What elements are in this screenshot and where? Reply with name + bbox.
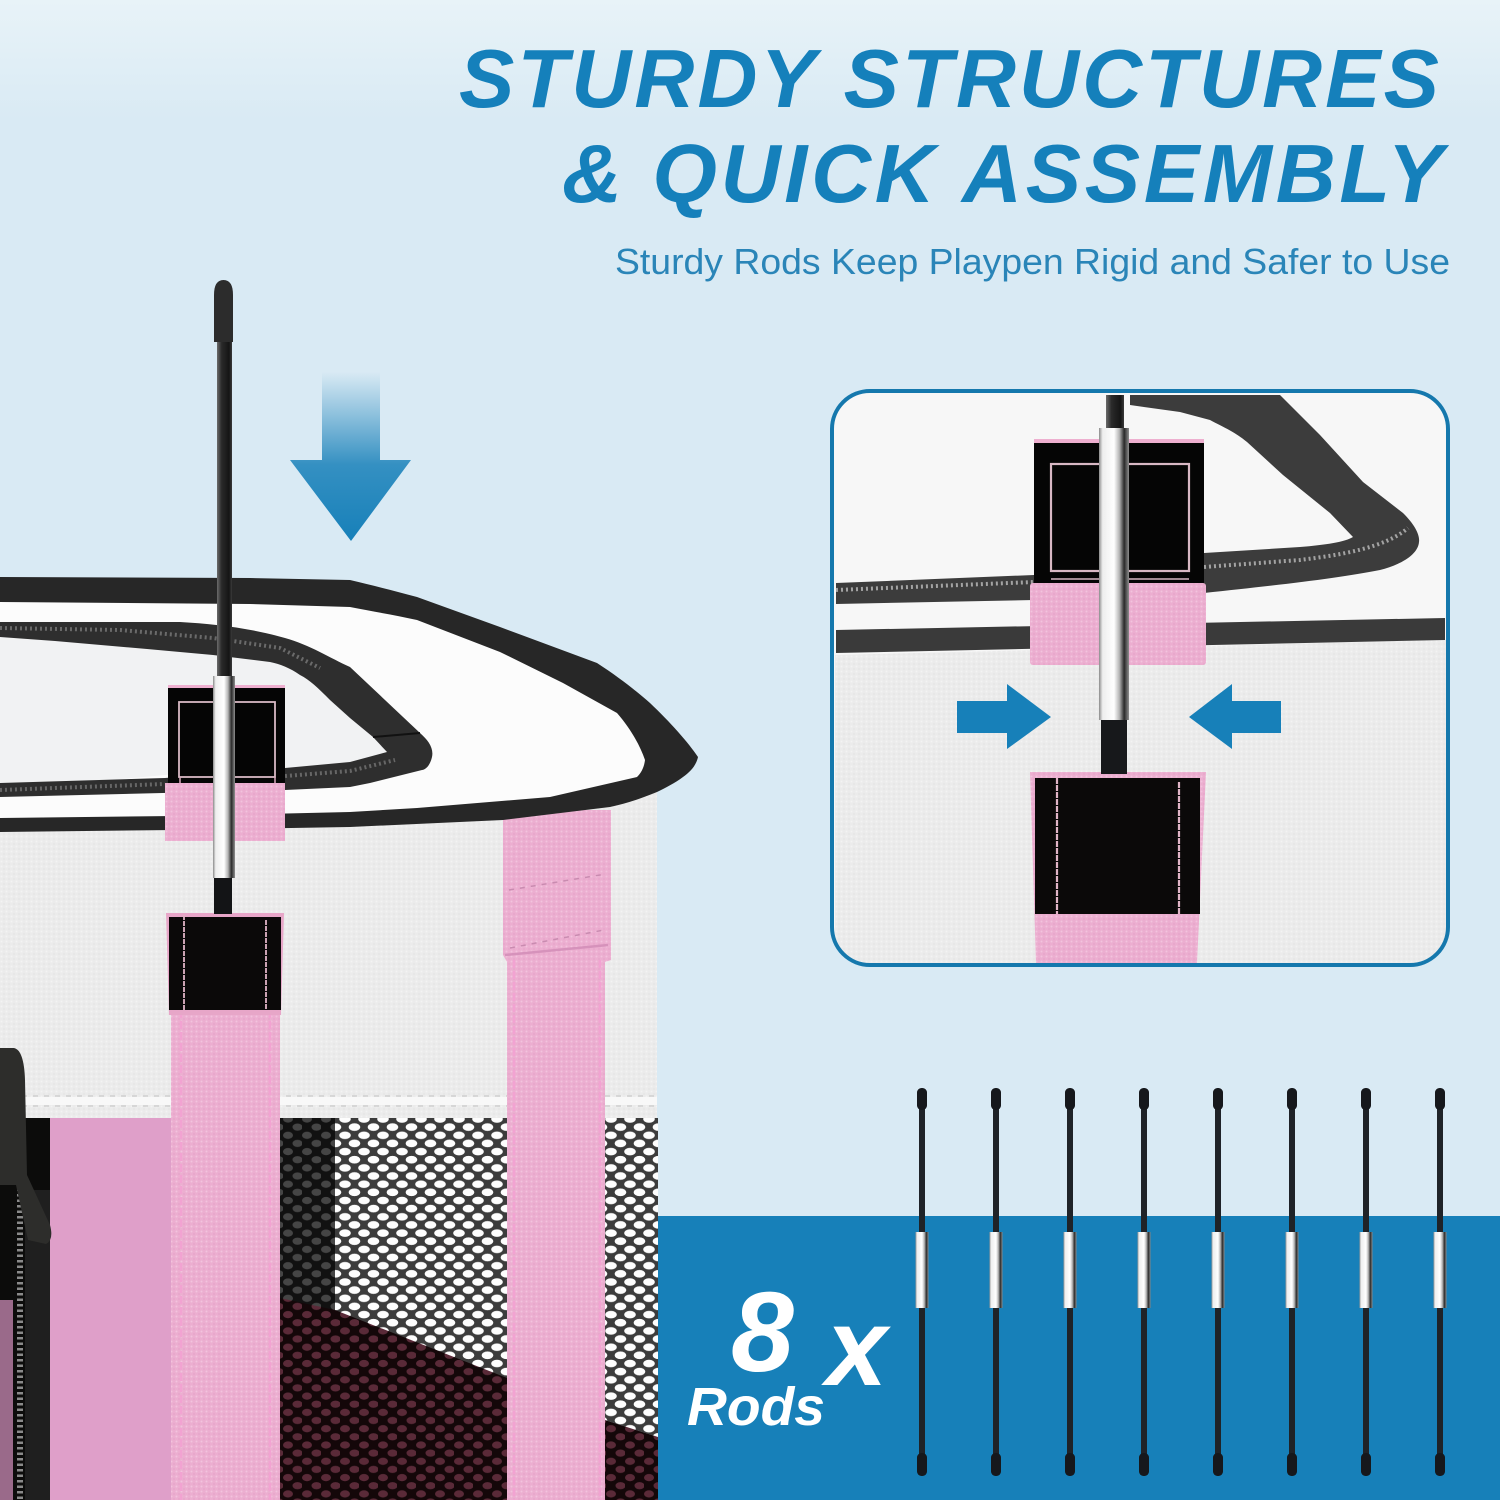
right pink strap xyxy=(503,810,611,1500)
inset: detail panel xyxy=(832,391,1448,965)
zipper loop interior xyxy=(0,630,387,790)
dark zipper panel xyxy=(0,1048,51,1500)
inset zipper teeth xyxy=(836,528,1408,590)
fabric side wall xyxy=(0,788,657,1118)
title xyxy=(459,32,1450,220)
arrow: inset right xyxy=(1189,684,1281,749)
arrow: downward insert xyxy=(290,372,411,541)
title: STURDY STRUCTURES xyxy=(459,32,1439,125)
inset lower fabric xyxy=(835,640,1446,963)
upper velcro tab xyxy=(165,685,285,841)
rods count label: 8 xyxy=(731,1269,794,1395)
rods count label: x xyxy=(821,1286,891,1409)
rods row xyxy=(916,1088,1446,1476)
playpen top cover xyxy=(0,590,690,825)
rods count label xyxy=(687,1269,891,1437)
lower velcro tab xyxy=(166,913,284,1015)
pink door panel xyxy=(50,1118,171,1500)
inset zipper and tape xyxy=(836,395,1419,604)
left pink strap xyxy=(171,1005,280,1500)
inset rim bar xyxy=(836,618,1445,653)
inset background xyxy=(832,391,1448,965)
inset rod xyxy=(1099,395,1129,774)
blue bottom band xyxy=(658,1216,1500,1500)
main rod xyxy=(213,280,235,914)
zipper loop xyxy=(0,622,432,797)
mesh window xyxy=(280,1118,658,1500)
arrow: inset left xyxy=(957,684,1051,749)
white stitching band xyxy=(0,1096,657,1106)
inset lower velcro xyxy=(1030,772,1206,963)
title: & QUICK ASSEMBLY xyxy=(562,127,1450,220)
top rim binding xyxy=(0,577,698,832)
inset upper velcro xyxy=(1030,439,1206,665)
subtitle: Sturdy Rods Keep Playpen Rigid and Safer to Use xyxy=(615,241,1450,282)
playpen body xyxy=(0,788,658,1500)
rods count label: Rods xyxy=(687,1377,825,1437)
inset frame xyxy=(832,391,1448,965)
